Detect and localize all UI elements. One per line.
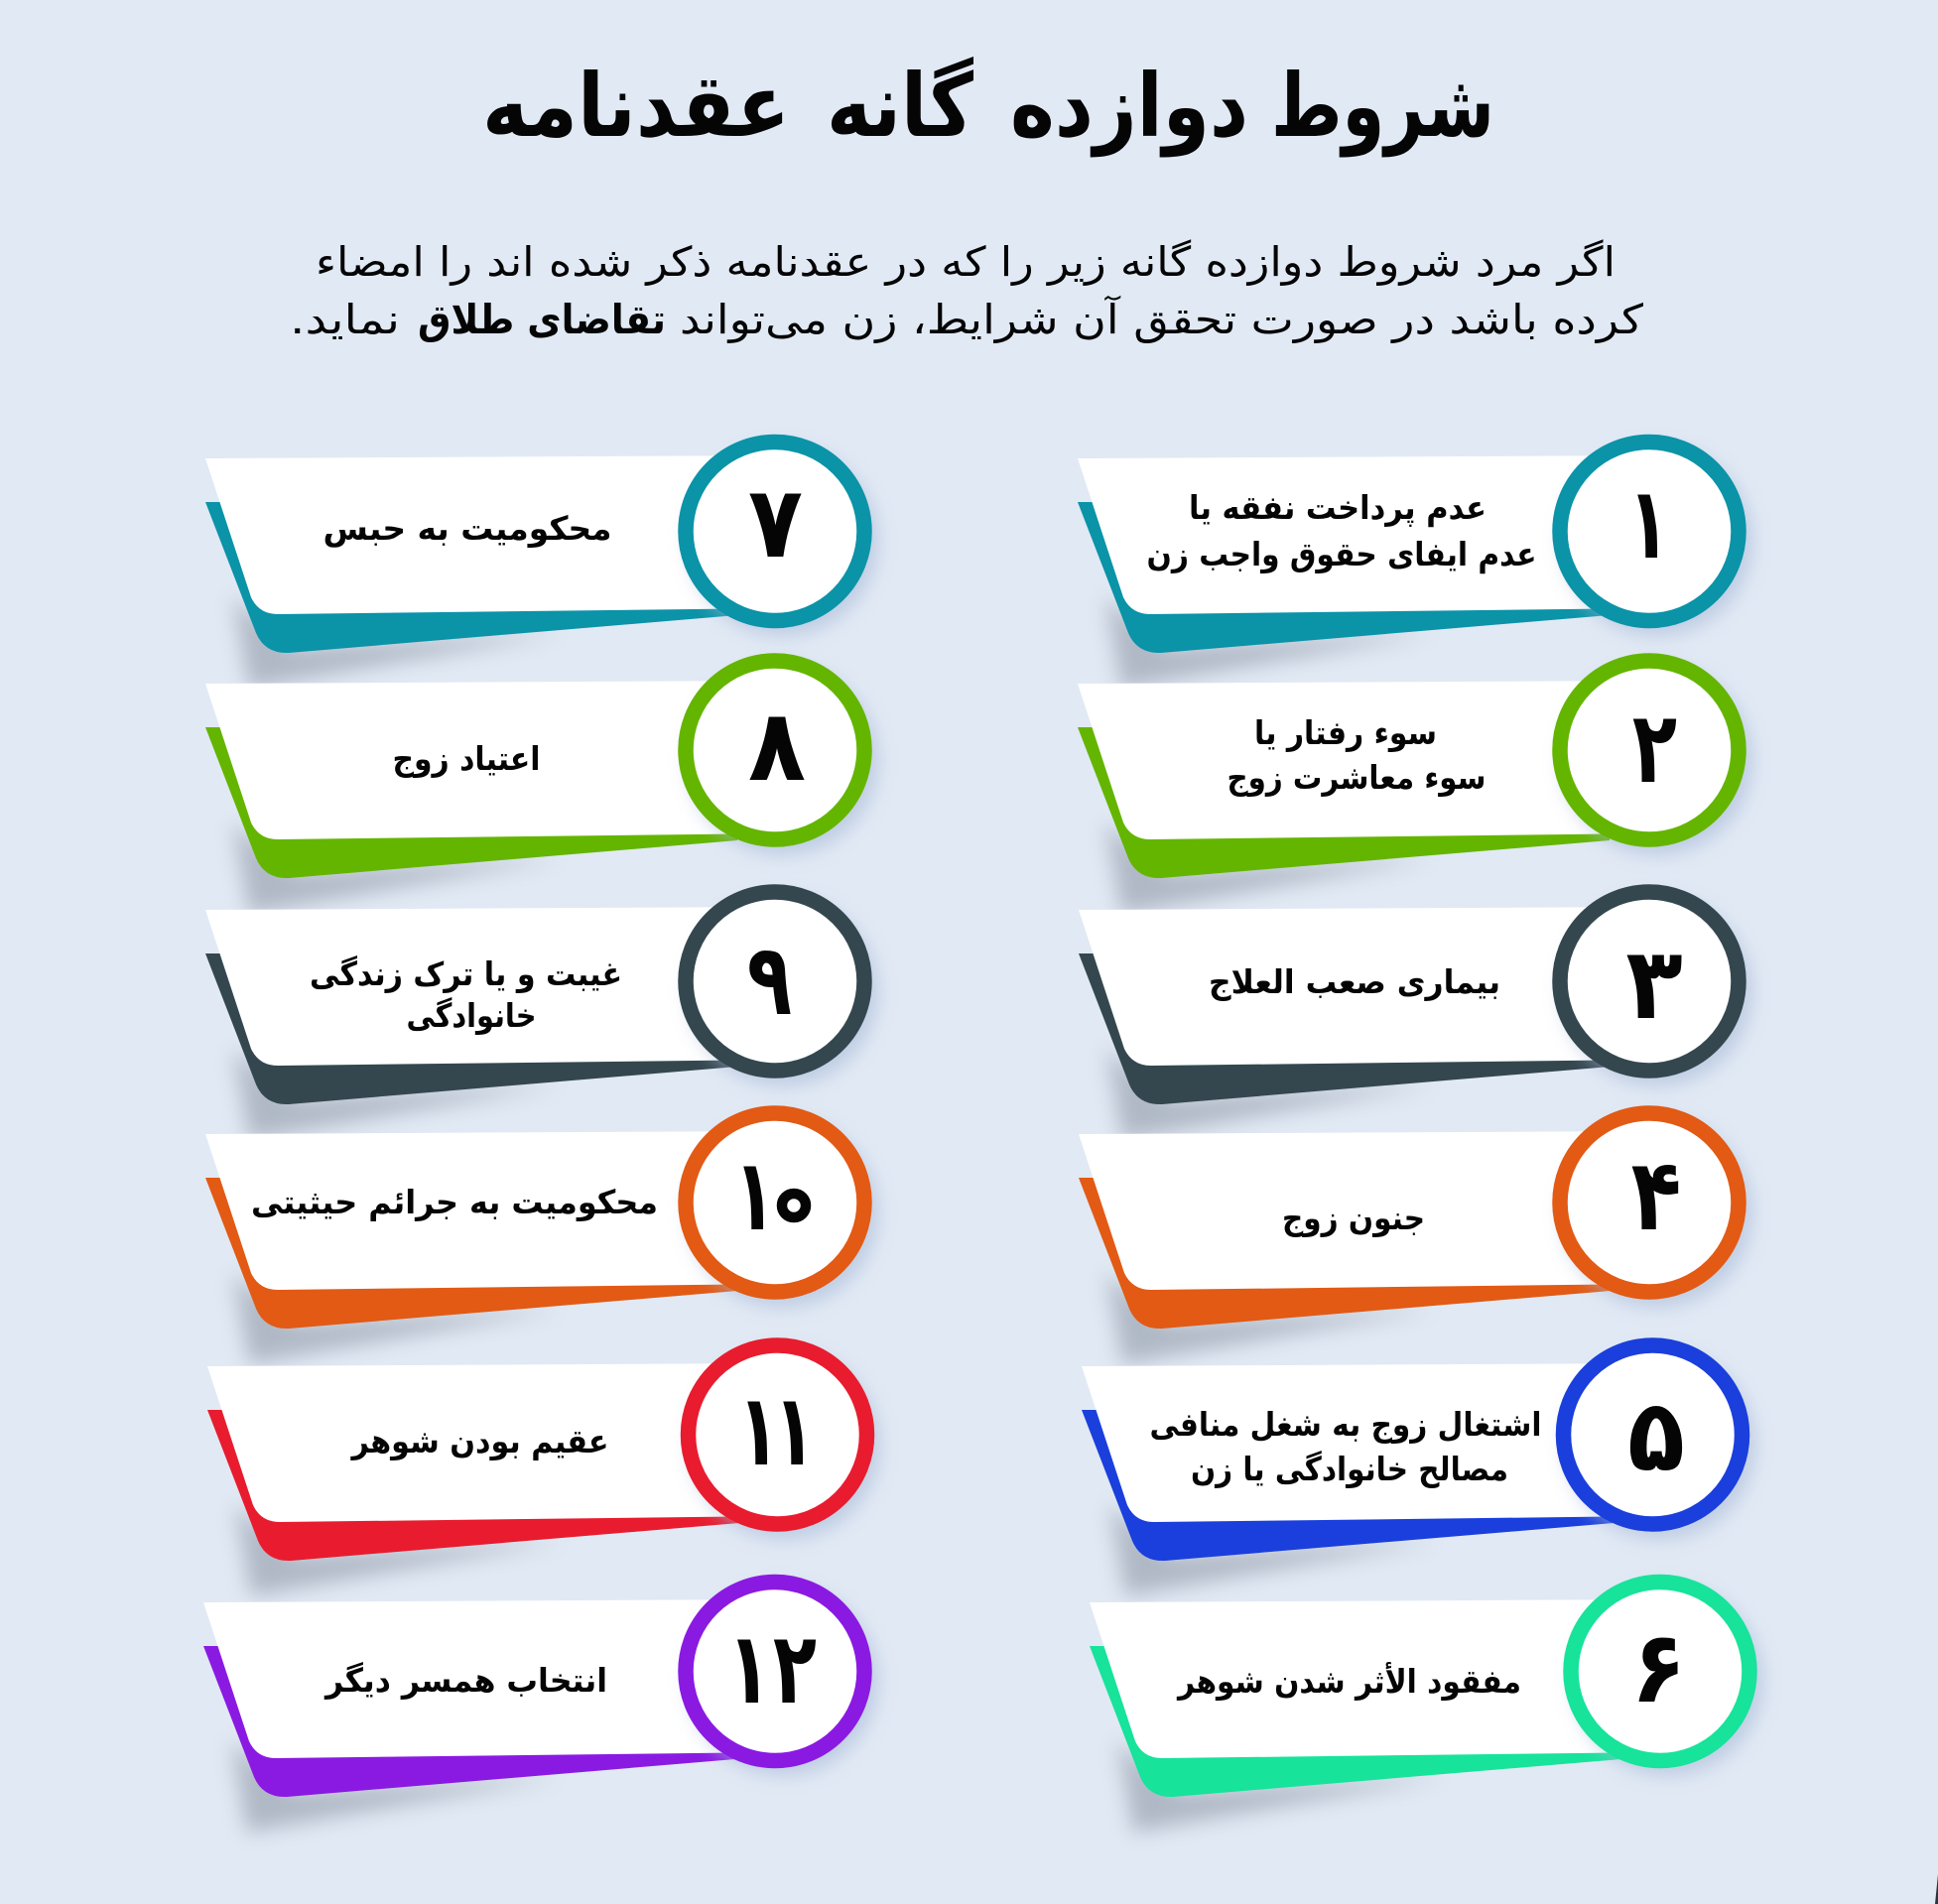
card shadow xyxy=(231,1741,561,1833)
card 4 xyxy=(1079,1113,1752,1364)
card shadow xyxy=(233,1049,563,1140)
number badge xyxy=(1560,443,1739,621)
card shadow xyxy=(233,823,563,914)
label text: جنون زوج xyxy=(1282,1199,1425,1238)
card 2 xyxy=(1078,661,1752,914)
corner sliver xyxy=(1935,1874,1938,1904)
label text: اشتغال زوج به شغل منافی xyxy=(1149,1405,1542,1445)
title: گانه xyxy=(827,55,974,157)
number badge xyxy=(1560,892,1739,1071)
circle shadow xyxy=(688,1117,878,1308)
ribbon xyxy=(207,1410,739,1561)
card 6 xyxy=(1090,1582,1763,1833)
number badge xyxy=(1564,1345,1743,1524)
card 11 xyxy=(207,1345,880,1596)
ribbon xyxy=(203,1646,735,1797)
intro paragraph xyxy=(290,238,1644,343)
number xyxy=(734,1139,815,1254)
circle shadow xyxy=(1565,1349,1755,1540)
label text: عدم ایفای حقوق واجب زن xyxy=(1147,535,1536,574)
title xyxy=(482,55,1494,158)
card shadow xyxy=(235,1505,565,1596)
number badge xyxy=(686,443,864,621)
number: ۲ xyxy=(1632,690,1677,806)
white label xyxy=(1079,1131,1650,1290)
title: دوازده xyxy=(1010,55,1248,158)
white label xyxy=(205,907,777,1066)
card 7 xyxy=(205,443,878,689)
circle shadow xyxy=(688,896,878,1086)
ribbon xyxy=(205,1178,737,1329)
number: ۷ xyxy=(748,466,803,580)
ribbon xyxy=(1079,953,1611,1104)
label text: سوء رفتار یا xyxy=(1254,713,1437,753)
card shadow xyxy=(233,1273,563,1364)
card shadow xyxy=(233,597,563,689)
label text: عقیم بودن شوهر xyxy=(350,1422,609,1461)
white label xyxy=(203,1599,775,1758)
white label xyxy=(205,681,777,839)
card shadow xyxy=(1106,1273,1436,1364)
number badge xyxy=(1560,661,1739,839)
card 1 xyxy=(1078,443,1752,689)
intro paragraph: تقاضای طلاق xyxy=(418,296,666,343)
white label xyxy=(1078,455,1649,614)
card 9 xyxy=(205,892,878,1140)
white label xyxy=(1090,1599,1661,1758)
ribbon xyxy=(1079,1178,1611,1329)
label text: مصالح خانوادگی یا زن xyxy=(1191,1450,1508,1489)
circle shadow xyxy=(688,1586,878,1776)
label text: مفقود الأثر شدن شوهر xyxy=(1176,1661,1521,1702)
number: ۴ xyxy=(1631,1138,1681,1253)
number: ۱ xyxy=(734,1139,775,1254)
number: ۱ xyxy=(774,1374,815,1489)
white label xyxy=(205,455,777,614)
label text: عدم پرداخت نفقه یا xyxy=(1189,488,1486,528)
circle shadow xyxy=(1562,445,1752,636)
number: ۳ xyxy=(1625,926,1683,1042)
label text: بیماری صعب العلاج xyxy=(1209,962,1500,1001)
circle shadow xyxy=(688,445,878,636)
card shadow xyxy=(1105,823,1435,914)
label text: محکومیت به جرائم حیثیتی xyxy=(251,1183,658,1222)
card 12 xyxy=(203,1582,878,1833)
circle shadow xyxy=(1573,1586,1763,1776)
number: ۲ xyxy=(773,1610,817,1726)
label text: غیبت و یا ترک زندگی xyxy=(310,954,622,994)
white label xyxy=(207,1363,779,1522)
circle shadow xyxy=(1562,1117,1752,1308)
number: ۶ xyxy=(1631,1609,1686,1725)
label text xyxy=(310,954,622,1036)
intro paragraph: نماید. xyxy=(290,296,400,343)
number: ۹ xyxy=(747,922,792,1038)
number badge xyxy=(1571,1582,1749,1760)
ribbon xyxy=(1082,1410,1614,1561)
number: ۱ xyxy=(1628,467,1669,582)
card 10 xyxy=(205,1113,878,1364)
number badge xyxy=(689,1345,867,1524)
label text: سوء معاشرت زوج xyxy=(1227,758,1486,798)
label text xyxy=(1227,713,1486,798)
ribbon xyxy=(1078,727,1610,878)
circle shadow xyxy=(688,665,878,855)
title: شروط xyxy=(1271,55,1494,158)
ribbon xyxy=(205,727,737,878)
number: ۰ xyxy=(773,1139,815,1254)
card shadow xyxy=(1106,1049,1436,1140)
ribbon xyxy=(1078,502,1610,653)
number badge xyxy=(686,1582,864,1760)
card 3 xyxy=(1079,892,1752,1140)
white label xyxy=(1082,1363,1653,1522)
white label xyxy=(1079,907,1650,1066)
card shadow xyxy=(1105,597,1435,689)
circle shadow xyxy=(1562,665,1752,855)
card 8 xyxy=(205,661,878,914)
white label xyxy=(205,1131,777,1290)
label text: خانوادگی xyxy=(407,996,536,1036)
ribbon xyxy=(1090,1646,1621,1797)
number badge xyxy=(686,661,864,839)
label text: انتخاب همسر دیگر xyxy=(323,1661,607,1701)
circle shadow xyxy=(690,1349,880,1540)
card shadow xyxy=(1117,1741,1447,1833)
number: ۸ xyxy=(748,689,806,805)
ribbon xyxy=(205,953,737,1104)
number badge xyxy=(686,892,864,1071)
number: ۱ xyxy=(727,1610,771,1726)
ribbon xyxy=(205,502,737,653)
white label xyxy=(1078,681,1649,839)
intro paragraph: کرده باشد در صورت تحقق آن شرایط، زن می‌تواند xyxy=(680,295,1644,343)
label text xyxy=(1147,488,1536,574)
number badge xyxy=(686,1113,864,1292)
number: ۱ xyxy=(738,1374,779,1489)
circle shadow xyxy=(1562,896,1752,1086)
number: ۵ xyxy=(1627,1378,1685,1494)
title: عقدنامه xyxy=(482,55,790,157)
label text: اعتیاد زوج xyxy=(393,739,540,779)
label text: محکومیت به حبس xyxy=(323,509,611,549)
card 5 xyxy=(1082,1345,1755,1596)
number badge xyxy=(1560,1113,1739,1292)
label text xyxy=(1149,1405,1542,1489)
card shadow xyxy=(1109,1505,1439,1596)
intro paragraph: اگر مرد شروط دوازده گانه زیر را که در عقدنامه ذکر شده اند را امضاء xyxy=(316,238,1615,286)
